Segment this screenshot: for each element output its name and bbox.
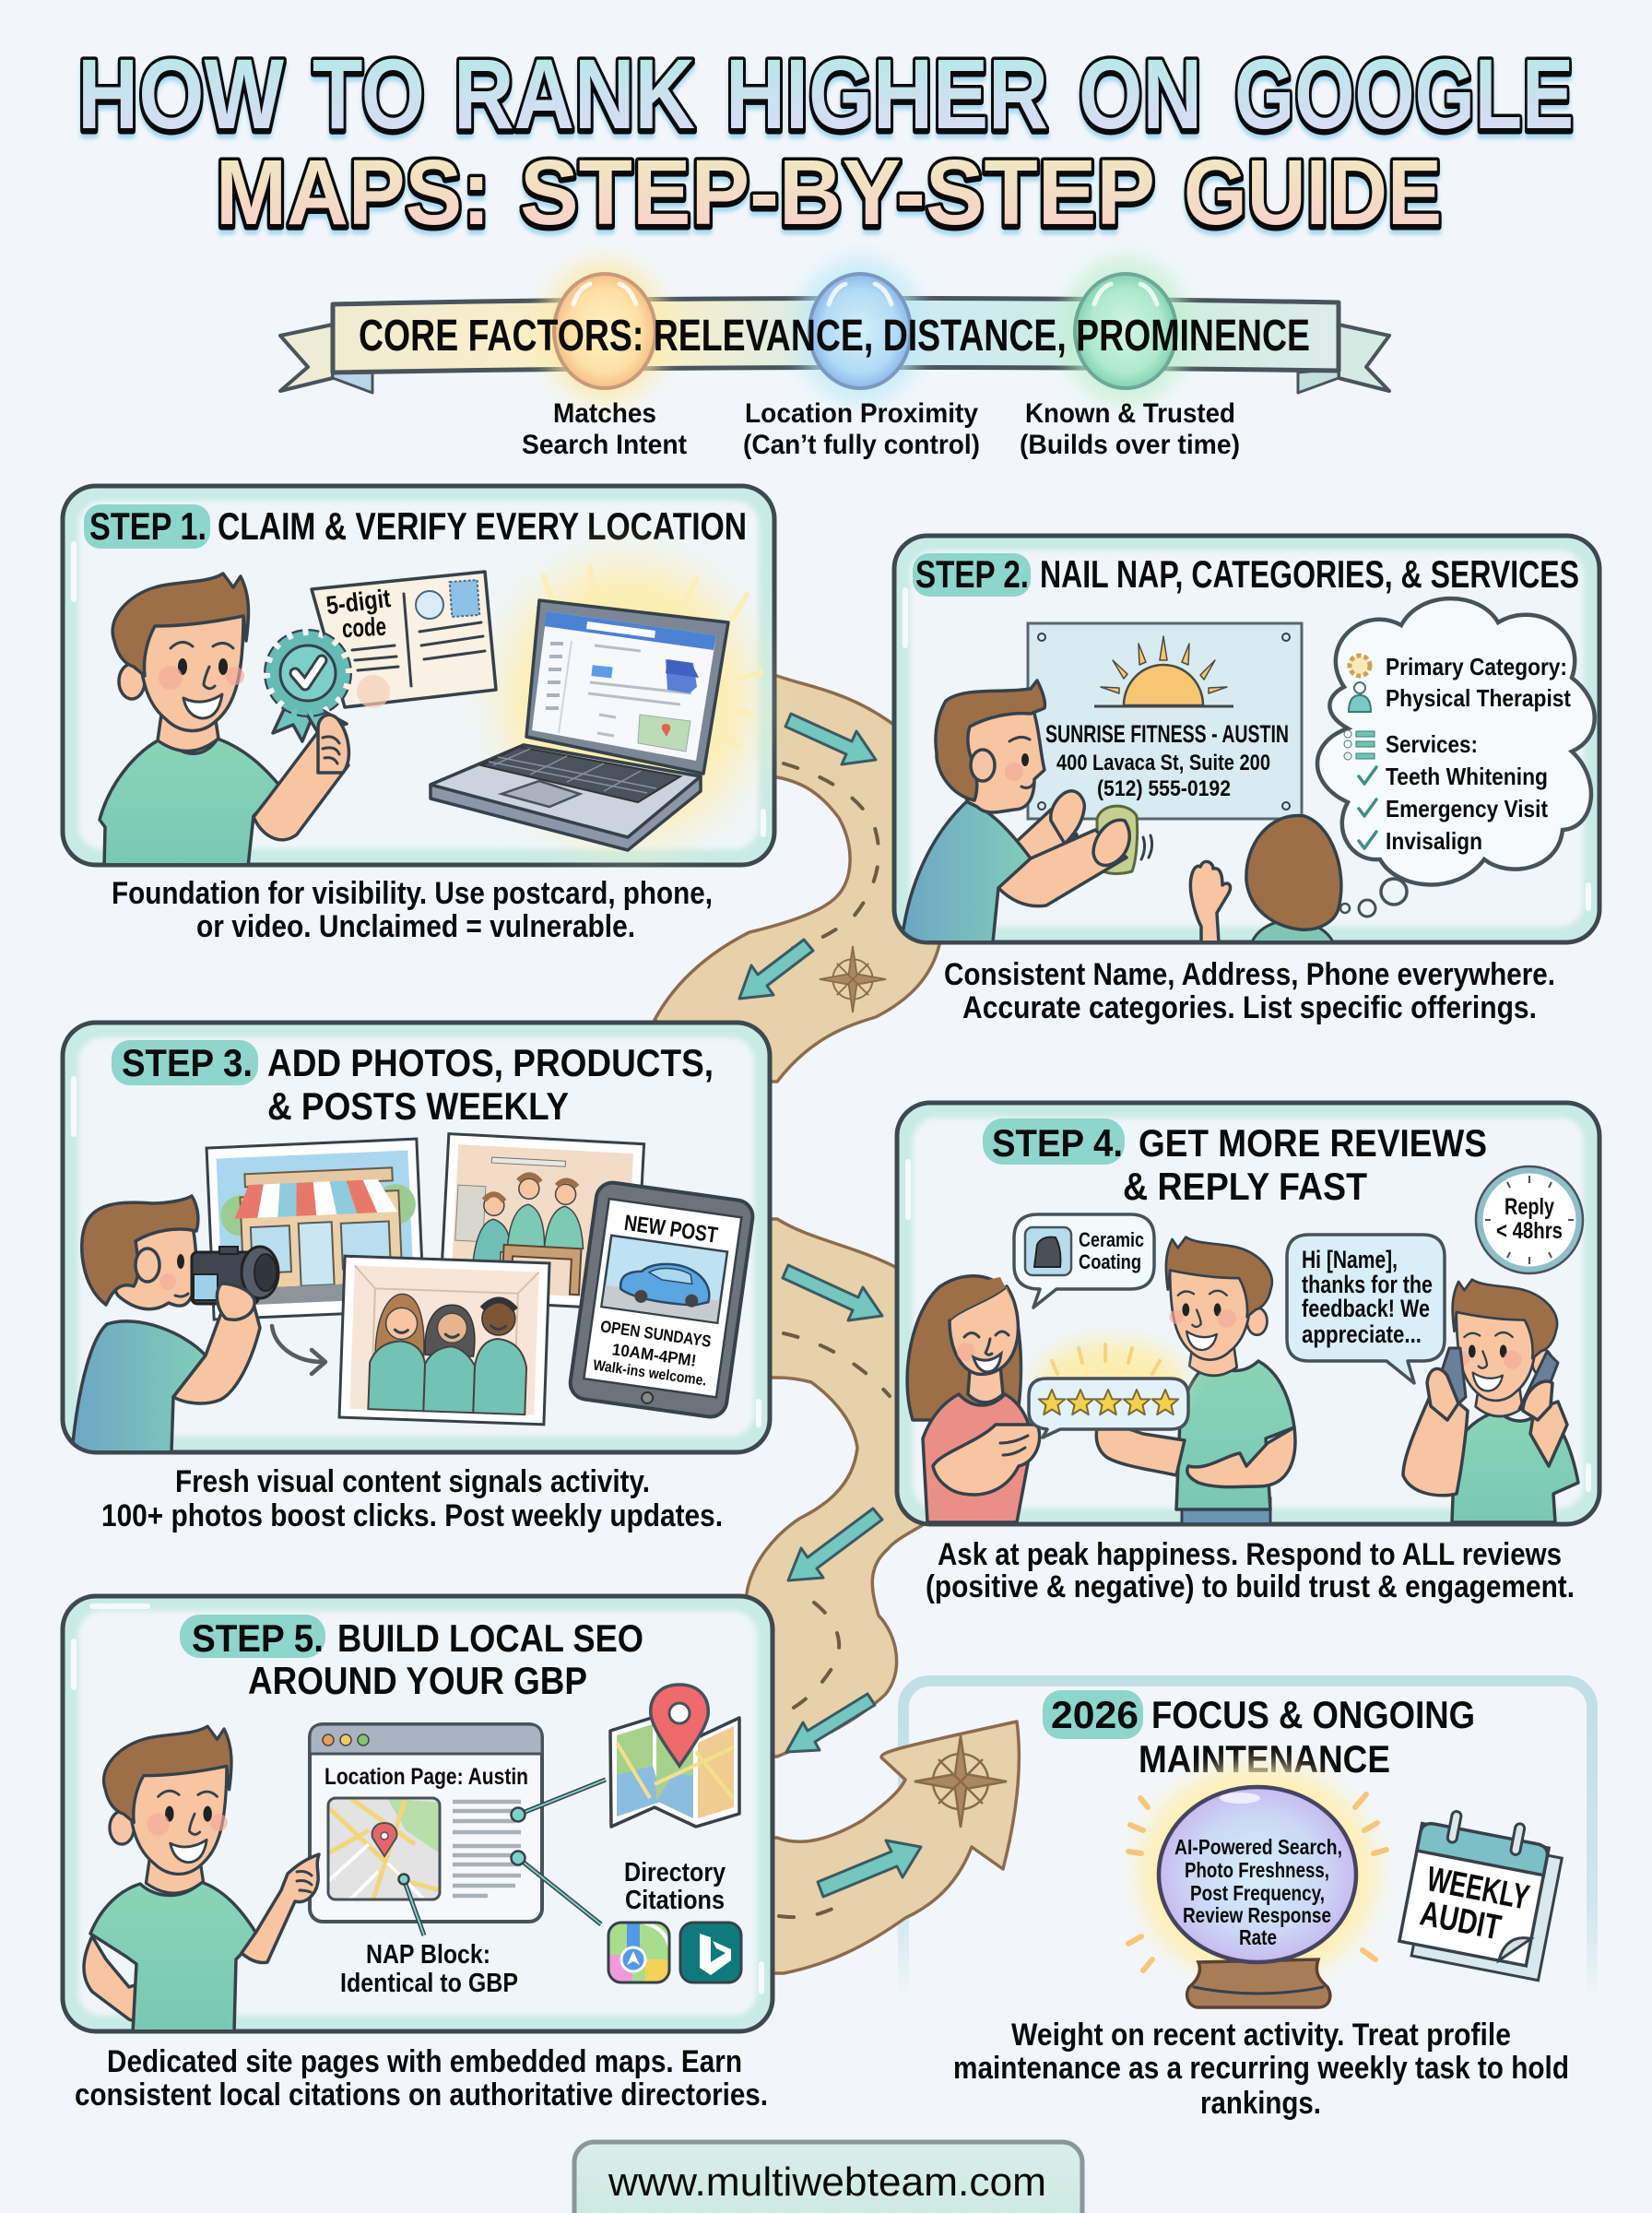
- icon: crystal ball: Rate: [1239, 1925, 1277, 1949]
- clock: reply under 48 hours: Reply: [1504, 1194, 1554, 1220]
- caption: 2026 focus: Weight on recent activity. Treat profile: [1011, 2018, 1511, 2053]
- clock: reply under 48 hours: [1476, 1166, 1583, 1273]
- speech bubble: five-star review: [1029, 1342, 1188, 1438]
- heading: 2026 focus: [1043, 1690, 1475, 1781]
- factor labels: (Can’t fully control): [743, 430, 980, 460]
- title: HOW: [77, 38, 284, 149]
- character: person with badge: [100, 574, 348, 867]
- speech bubble: owner reply: appreciate...: [1302, 1320, 1422, 1348]
- character: person pointing: [84, 1726, 319, 2033]
- heading: step 3: [112, 1040, 714, 1128]
- character: happy customer: [907, 1276, 1040, 1522]
- tablet: new post: 10AM-4PM!: [611, 1340, 698, 1370]
- browser: location page: Location Page: Austin: [324, 1764, 528, 1790]
- caption: step 1: [112, 876, 713, 944]
- panel: step 1: [63, 486, 774, 867]
- speech bubble: owner reply: feedback! We: [1302, 1295, 1430, 1322]
- thought cloud: categories and services: [1317, 598, 1595, 917]
- caption: step 2: [944, 957, 1555, 1025]
- caption: step 5: Dedicated site pages with embedded maps. Earn: [107, 2044, 742, 2079]
- heading: step 1: [84, 504, 747, 549]
- thought cloud: categories and services: Primary Category:: [1386, 653, 1567, 680]
- photo: team portrait: [339, 1256, 549, 1425]
- panel: 2026 focus frame: [903, 1681, 1592, 2068]
- icon: laptop with map listing: [431, 562, 761, 850]
- heading: step 4: [983, 1118, 1487, 1208]
- heading: step 5: AROUND YOUR GBP: [248, 1659, 587, 1702]
- icon: therapist: [1349, 682, 1371, 712]
- speech bubble: owner reply: Hi [Name],: [1302, 1246, 1398, 1273]
- caption: step 4: Ask at peak happiness. Respond to ALL reviews: [938, 1537, 1562, 1572]
- character: person cleaning sign: [902, 680, 1152, 942]
- icon: compass: [820, 946, 886, 1012]
- icon: camera: [192, 1247, 278, 1304]
- heading: step 3: ADD PHOTOS, PRODUCTS,: [267, 1041, 714, 1084]
- thought cloud: categories and services: Emergency Visit: [1386, 795, 1548, 822]
- speech bubble: ceramic coating: Ceramic: [1079, 1228, 1144, 1251]
- heading: 2026 focus: 2026: [1051, 1693, 1139, 1736]
- icon: verification postcard: [312, 572, 496, 708]
- label: directory citations: Directory: [624, 1858, 726, 1888]
- heading: step 4: GET MORE REVIEWS: [1139, 1121, 1487, 1165]
- speech bubble: ceramic coating: [1014, 1214, 1154, 1308]
- ribbon tails: [280, 325, 1389, 393]
- footer: website: [574, 2142, 1082, 2213]
- heading: step 1: CLAIM & VERIFY EVERY LOCATION: [218, 504, 747, 548]
- label: directory citations: Citations: [625, 1886, 725, 1915]
- caption: step 2: Consistent Name, Address, Phone everywhere.: [944, 957, 1555, 992]
- browser: location page: [310, 1724, 542, 1922]
- heading: step 3: & POSTS WEEKLY: [267, 1084, 569, 1128]
- icon: folded map with pin: [610, 1685, 739, 1827]
- caption: step 3: 100+ photos boost clicks. Post weekly updates.: [101, 1498, 723, 1533]
- heading: step 5: BUILD LOCAL SEO: [337, 1616, 643, 1660]
- label: NAP block: NAP Block:: [366, 1940, 490, 1970]
- heading: 2026 focus: FOCUS & ONGOING: [1151, 1693, 1475, 1736]
- factor labels: Matches: [553, 398, 656, 429]
- sign: business NAP plaque: SUNRISE FITNESS - AUSTIN: [1045, 720, 1289, 748]
- title: HIGHER: [726, 38, 1048, 149]
- connector lines: [398, 1780, 606, 1935]
- tablet: new post: OPEN SUNDAYS: [599, 1317, 713, 1351]
- factor labels: (Builds over time): [1020, 430, 1240, 460]
- caption: step 5: [75, 2044, 768, 2112]
- photo: storefront: [206, 1139, 424, 1320]
- icon: verified rosette: [268, 633, 348, 773]
- heading: step 5: [180, 1615, 643, 1702]
- icon: maps app: [608, 1923, 669, 1982]
- character: business owner: [1096, 1237, 1295, 1526]
- icon: crystal ball: Review Response: [1183, 1903, 1331, 1927]
- title: TO: [313, 38, 425, 149]
- title: ON: [1079, 38, 1202, 149]
- heading: 2026 focus: MAINTENANCE: [1139, 1737, 1390, 1781]
- caption: 2026 focus: maintenance as a recurring weekly task to hold: [953, 2051, 1569, 2086]
- factor labels: Known & Trusted: [1025, 398, 1235, 429]
- photo: team at counter: [440, 1134, 644, 1309]
- label: NAP block: Identical to GBP: [340, 1969, 518, 1998]
- caption: step 4: [926, 1537, 1575, 1604]
- sign: business NAP plaque: [1028, 623, 1302, 819]
- icon: product: [1025, 1227, 1071, 1275]
- tablet: new post: Walk-ins welcome.: [592, 1358, 707, 1390]
- caption: step 4: (positive & negative) to build trust & engagement.: [926, 1569, 1575, 1604]
- icon: crystal ball: AI-Powered Search,: [1174, 1835, 1342, 1859]
- factor labels: Location Proximity: [745, 398, 978, 429]
- panel: step 4: [897, 1103, 1599, 1526]
- panel: step 5: [63, 1596, 773, 2033]
- character: customer seen from behind: [1190, 816, 1341, 942]
- sign: business NAP plaque: 400 Lavaca St, Suite 200: [1056, 751, 1270, 775]
- speech bubble: owner reply: thanks for the: [1302, 1271, 1433, 1298]
- ribbon body: [333, 298, 1339, 373]
- factor labels: Search Intent: [522, 430, 687, 460]
- label: NAP block: [340, 1940, 518, 1998]
- thought cloud: categories and services: Physical Therapist: [1386, 684, 1571, 712]
- icon: verification postcard: 5-digit: [324, 584, 392, 620]
- factor orbs: [542, 259, 1188, 403]
- speech bubble: owner reply: [1287, 1235, 1445, 1383]
- icon: verification postcard: code: [341, 612, 387, 643]
- caption: step 5: consistent local citations on authoritative directories.: [75, 2077, 768, 2112]
- heading: step 4: & REPLY FAST: [1123, 1165, 1367, 1208]
- map embed: [328, 1798, 440, 1899]
- footer: website: www.multiwebteam.com: [608, 2160, 1046, 2205]
- title: GUIDE: [1184, 141, 1442, 244]
- icon: list: [1344, 730, 1375, 760]
- title: RANK: [454, 38, 695, 149]
- panel: step 2: [894, 536, 1599, 942]
- tablet: new post: [568, 1180, 755, 1419]
- icon: compass large: [914, 1735, 1007, 1828]
- character: owner on the phone: [1403, 1280, 1578, 1522]
- arrow: to step 2: [785, 714, 876, 764]
- icon: crystal ball: Photo Freshness,: [1185, 1858, 1329, 1882]
- icon: gear: [1350, 656, 1370, 676]
- heading: step 5: STEP 5.: [192, 1616, 324, 1660]
- icon: phones: [1436, 1348, 1558, 1411]
- factor labels: [522, 398, 1240, 460]
- caption: 2026 focus: [953, 2018, 1569, 2121]
- core factors banner: [280, 259, 1389, 403]
- heading: step 1: STEP 1.: [89, 504, 206, 548]
- arrow: to mid road: [788, 1509, 882, 1580]
- caption: step 1: or video. Unclaimed = vulnerable.: [196, 909, 635, 944]
- caption: step 1: Foundation for visibility. Use postcard, phone,: [112, 876, 713, 911]
- arrow: to step 5: [786, 1694, 875, 1752]
- arrow: photo to gallery: [272, 1326, 325, 1374]
- winding road: big arrow to 2026 focus: [738, 1722, 1019, 1973]
- icon: weekly audit calendar: [1397, 1805, 1567, 1981]
- caption: step 3: Fresh visual content signals activity.: [175, 1464, 650, 1499]
- thought cloud: categories and services: Teeth Whitening: [1386, 763, 1548, 790]
- icon: crystal ball: Post Frequency,: [1190, 1881, 1325, 1905]
- heading: step 4: STEP 4.: [992, 1121, 1123, 1165]
- sign: business NAP plaque: (512) 555-0192: [1097, 776, 1231, 801]
- icon: bing: [680, 1923, 741, 1982]
- icon: weekly audit calendar: AUDIT: [1417, 1894, 1504, 1947]
- winding road: steps 3 to 5: [738, 1219, 940, 1757]
- speech bubble: ceramic coating: Coating: [1079, 1250, 1141, 1273]
- banner text: CORE FACTORS: RELEVANCE, DISTANCE, PROMINENCE: [359, 312, 1310, 361]
- arrow: to step 3: [739, 940, 813, 999]
- heading: step 2: STEP 2.: [915, 552, 1029, 596]
- clock: reply under 48 hours: < 48hrs: [1496, 1218, 1563, 1244]
- arrow: to step 4: [783, 1265, 882, 1320]
- caption: step 2: Accurate categories. List specific offerings.: [962, 990, 1537, 1025]
- caption: step 3: [101, 1464, 723, 1533]
- character: photographer: [72, 1196, 278, 1452]
- arrow: to 2026: [818, 1840, 921, 1897]
- icon: crystal ball: [1128, 1766, 1386, 2007]
- thought cloud: categories and services: Invisalign: [1386, 827, 1482, 855]
- title: STEP-BY-STEP: [520, 141, 1155, 244]
- thought cloud: categories and services: Services:: [1386, 730, 1478, 758]
- icon: blue car: [619, 1258, 713, 1308]
- title: MAPS:: [216, 141, 490, 244]
- label: directory citations: [624, 1858, 726, 1915]
- title: [77, 38, 1574, 244]
- winding road: steps 1 to 3: [655, 676, 940, 1082]
- tablet: new post: NEW POST: [622, 1211, 719, 1249]
- heading: step 3: STEP 3.: [122, 1041, 253, 1084]
- caption: 2026 focus: rankings.: [1200, 2086, 1321, 2121]
- panel: step 3: [63, 1023, 770, 1452]
- icon: weekly audit calendar: WEEKLY: [1423, 1860, 1532, 1918]
